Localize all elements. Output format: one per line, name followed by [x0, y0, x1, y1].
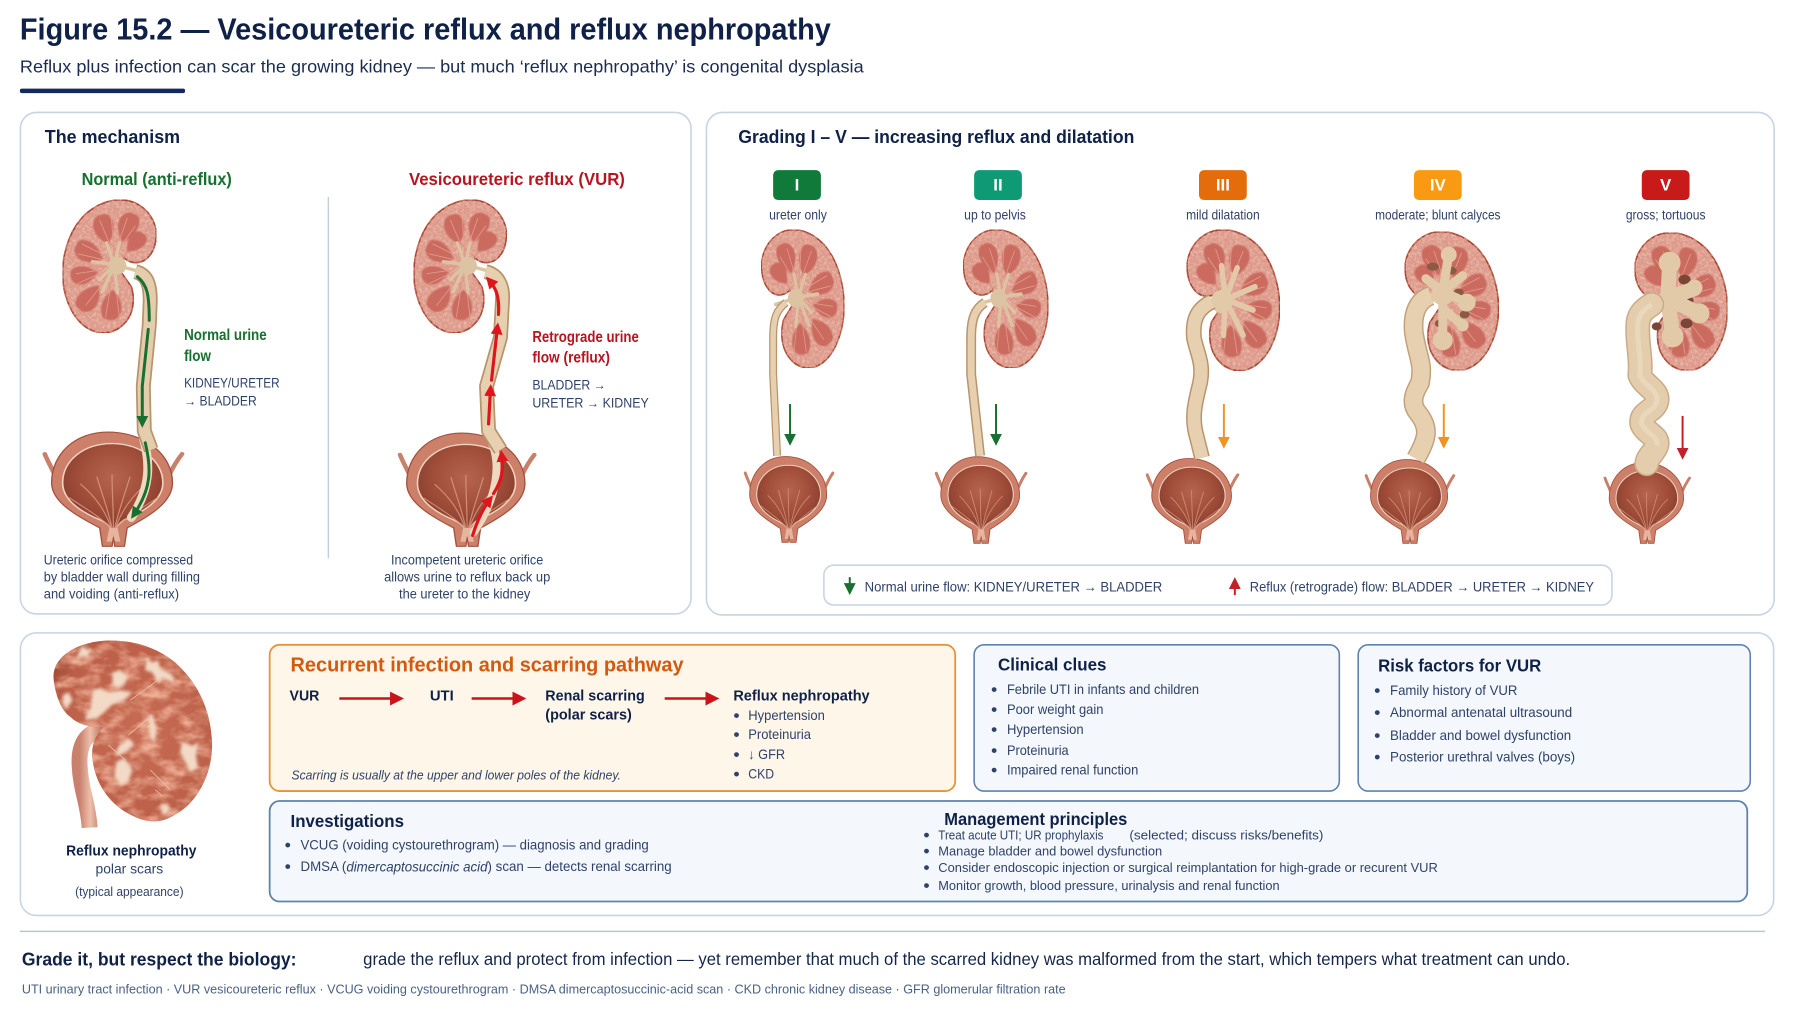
heading: the mechanism: The mechanism	[45, 126, 180, 147]
list: outcomes: ↓ GFR	[748, 747, 785, 762]
list: outcomes	[733, 705, 825, 784]
list: investigations: •	[285, 835, 291, 855]
pathway: VUR to UTI to scarring to nephropathy	[290, 689, 870, 784]
icon: green down arrow	[849, 577, 851, 591]
label: normal urine flow: → BLADDER	[184, 394, 257, 409]
grade II: up to pelvis	[964, 207, 1026, 222]
caption: VUR: Incompetent ureteric orifice	[391, 553, 543, 568]
grade I: I	[795, 176, 799, 195]
list: risk factors: Family history of VUR	[1390, 683, 1518, 698]
list: management principles: Treat acute UTI; UR prophylaxis	[938, 827, 1103, 842]
takeaway: grade the reflux and protect from infection — yet remember that much of the scarred kidney was malformed from the start, which tempers what treatment can undo.	[363, 949, 1570, 969]
list: outcomes: •	[733, 744, 740, 764]
takeaway: Grade it, but respect the biology:	[22, 949, 297, 970]
grade I	[745, 170, 844, 542]
list: management principles	[923, 825, 1438, 896]
grade IV: moderate; blunt calyces	[1375, 207, 1501, 222]
heading: clinical clues: Clinical clues	[998, 655, 1106, 675]
label: retrograde urine flow	[532, 329, 649, 411]
list: management principles: •	[923, 876, 930, 896]
list: risk factors: •	[1374, 681, 1380, 701]
caption: reflux nephropathy	[66, 842, 197, 899]
caption: reflux nephropathy: Reflux nephropathy	[66, 842, 197, 859]
abbreviations: UTI urinary tract infection · VUR vesicoureteric reflux · VCUG voiding cystourethrogram · DMSA dimercaptosuccinic-acid scan · CKD chronic kidney disease · GFR glomerular filtration rate	[22, 982, 1066, 997]
label: normal urine flow: Normal urine	[184, 327, 267, 344]
pathway: VUR to UTI to scarring to nephropathy: VUR	[290, 689, 320, 705]
caption: normal: and voiding (anti-reflux)	[44, 587, 179, 602]
list: management principles: •	[923, 825, 930, 845]
list: management principles: •	[923, 858, 930, 878]
list: risk factors: •	[1374, 702, 1380, 722]
caption: normal	[44, 553, 200, 602]
caption: reflux nephropathy: polar scars	[96, 861, 163, 877]
caption: reflux nephropathy: (typical appearance)	[75, 884, 184, 899]
title: Figure 15.2 — Vesicoureteric reflux and reflux nephropathy	[20, 13, 831, 46]
legend: Normal urine flow: KIDNEY/URETER → BLADDER	[865, 580, 1162, 595]
legend: Reflux (retrograde) flow: BLADDER → URETER → KIDNEY	[1250, 580, 1594, 595]
caption: VUR	[384, 553, 550, 602]
list: clinical clues: •	[991, 740, 997, 760]
subtitle: Reflux plus infection can scar the growing kidney — but much ‘reflux nephropathy’ is congenital dysplasia	[20, 57, 864, 77]
list: management principles: Monitor growth, blood pressure, urinalysis and renal function	[938, 878, 1280, 893]
grade III: III	[1216, 176, 1230, 195]
list: outcomes: CKD	[748, 767, 774, 782]
list: investigations	[285, 835, 672, 877]
list: clinical clues: •	[991, 760, 997, 780]
list: investigations: •	[285, 857, 291, 877]
pathway: VUR to UTI to scarring to nephropathy: Reflux nephropathy	[733, 689, 870, 705]
label: normal urine flow: flow	[184, 348, 212, 365]
list: clinical clues: •	[991, 719, 997, 739]
grade II: II	[993, 176, 1003, 195]
heading: normal: Normal (anti-reflux)	[82, 169, 232, 189]
list: outcomes: •	[733, 764, 740, 784]
list: risk factors: •	[1374, 725, 1380, 745]
note: scarring location: Scarring is usually at the upper and lower poles of the kidney.	[292, 768, 621, 783]
list: management principles: Manage bladder and bowel dysfunction	[938, 843, 1162, 858]
list: risk factors: Abnormal antenatal ultrasound	[1390, 705, 1572, 720]
list: clinical clues: Hypertension	[1007, 722, 1084, 737]
label: normal urine flow	[184, 327, 280, 409]
grade III	[1147, 170, 1280, 543]
label: retrograde urine flow: Retrograde urine	[532, 329, 639, 346]
box: risk factors for VUR	[1358, 645, 1750, 791]
illustration: normal kidney, ureter, bladder	[45, 200, 182, 546]
list: clinical clues: Proteinuria	[1007, 743, 1069, 758]
list: clinical clues: Poor weight gain	[1007, 702, 1103, 717]
panel: grading I–V	[706, 112, 1774, 615]
list: management principles: •	[923, 841, 930, 861]
heading: investigations: Investigations	[291, 811, 404, 831]
list: investigations: VCUG (voiding cystourethrogram) — diagnosis and grading	[300, 837, 649, 852]
arrow: normal flow down	[133, 277, 149, 515]
list: risk factors: Posterior urethral valves (boys)	[1390, 750, 1575, 765]
box: clinical clues	[974, 645, 1339, 791]
heading: management principles: Management principles	[944, 809, 1127, 829]
arrow: retrograde flow up	[473, 280, 502, 535]
grade V: V	[1660, 176, 1672, 195]
caption: normal: Ureteric orifice compressed	[44, 553, 193, 568]
panel: reflux nephropathy and clinical summary	[20, 633, 1774, 915]
grade I: ureter only	[769, 207, 827, 222]
list: management principles: Consider endoscopic injection or surgical reimplantation for high-grade or recurent VUR	[938, 860, 1438, 875]
list: clinical clues: Impaired renal function	[1007, 763, 1138, 778]
pathway: VUR to UTI to scarring to nephropathy: UTI	[430, 689, 454, 705]
list: risk factors: •	[1374, 747, 1380, 767]
list: clinical clues: •	[991, 699, 997, 719]
list: clinical clues: •	[991, 680, 997, 700]
heading: risk factors: Risk factors for VUR	[1378, 656, 1541, 676]
list: clinical clues: Febrile UTI in infants and children	[1007, 682, 1199, 697]
pathway: VUR to UTI to scarring to nephropathy: Renal scarring	[545, 689, 645, 705]
caption: VUR: the ureter to the kidney	[399, 587, 531, 602]
grade V: gross; tortuous	[1626, 207, 1706, 222]
box: investigations and management	[270, 801, 1747, 902]
grade III: mild dilatation	[1186, 207, 1260, 222]
list: outcomes: •	[733, 724, 740, 744]
grade II	[936, 170, 1048, 543]
heading: VUR: Vesicoureteric reflux (VUR)	[409, 169, 625, 189]
heading: pathway: Recurrent infection and scarring pathway	[291, 655, 684, 677]
heading: grading: Grading I – V — increasing reflux and dilatation	[738, 126, 1134, 147]
label: retrograde urine flow: BLADDER →	[532, 378, 606, 393]
list: risk factors: Bladder and bowel dysfunction	[1390, 728, 1571, 743]
box: recurrent infection and scarring pathway	[270, 645, 955, 791]
list: outcomes: Proteinuria	[748, 727, 811, 742]
panel: the mechanism	[20, 112, 691, 614]
illustration: VUR kidney, ureter, bladder	[400, 200, 534, 546]
list: clinical clues	[991, 680, 1199, 780]
label: retrograde urine flow: flow (reflux)	[532, 350, 610, 367]
list: investigations: DMSA (dimercaptosuccinic acid) scan — detects renal scarring	[300, 859, 672, 874]
list: risk factors	[1374, 681, 1575, 767]
label: normal urine flow: KIDNEY/URETER	[184, 376, 280, 391]
caption: VUR: allows urine to reflux back up	[384, 570, 550, 585]
label: retrograde urine flow: URETER → KIDNEY	[532, 396, 649, 411]
icon: red up arrow	[1234, 581, 1236, 595]
list: outcomes: Hypertension	[748, 708, 825, 723]
grade V	[1605, 170, 1727, 543]
caption: normal: by bladder wall during filling	[44, 570, 200, 585]
grade IV: IV	[1430, 176, 1447, 195]
illustration: scarred kidney	[54, 641, 212, 828]
list: outcomes: •	[733, 705, 740, 725]
grade IV	[1366, 170, 1501, 543]
pathway: VUR to UTI to scarring to nephropathy: (polar scars)	[545, 707, 632, 723]
legend	[824, 565, 1612, 605]
list: management principles: (selected; discuss risks/benefits)	[1129, 827, 1323, 842]
